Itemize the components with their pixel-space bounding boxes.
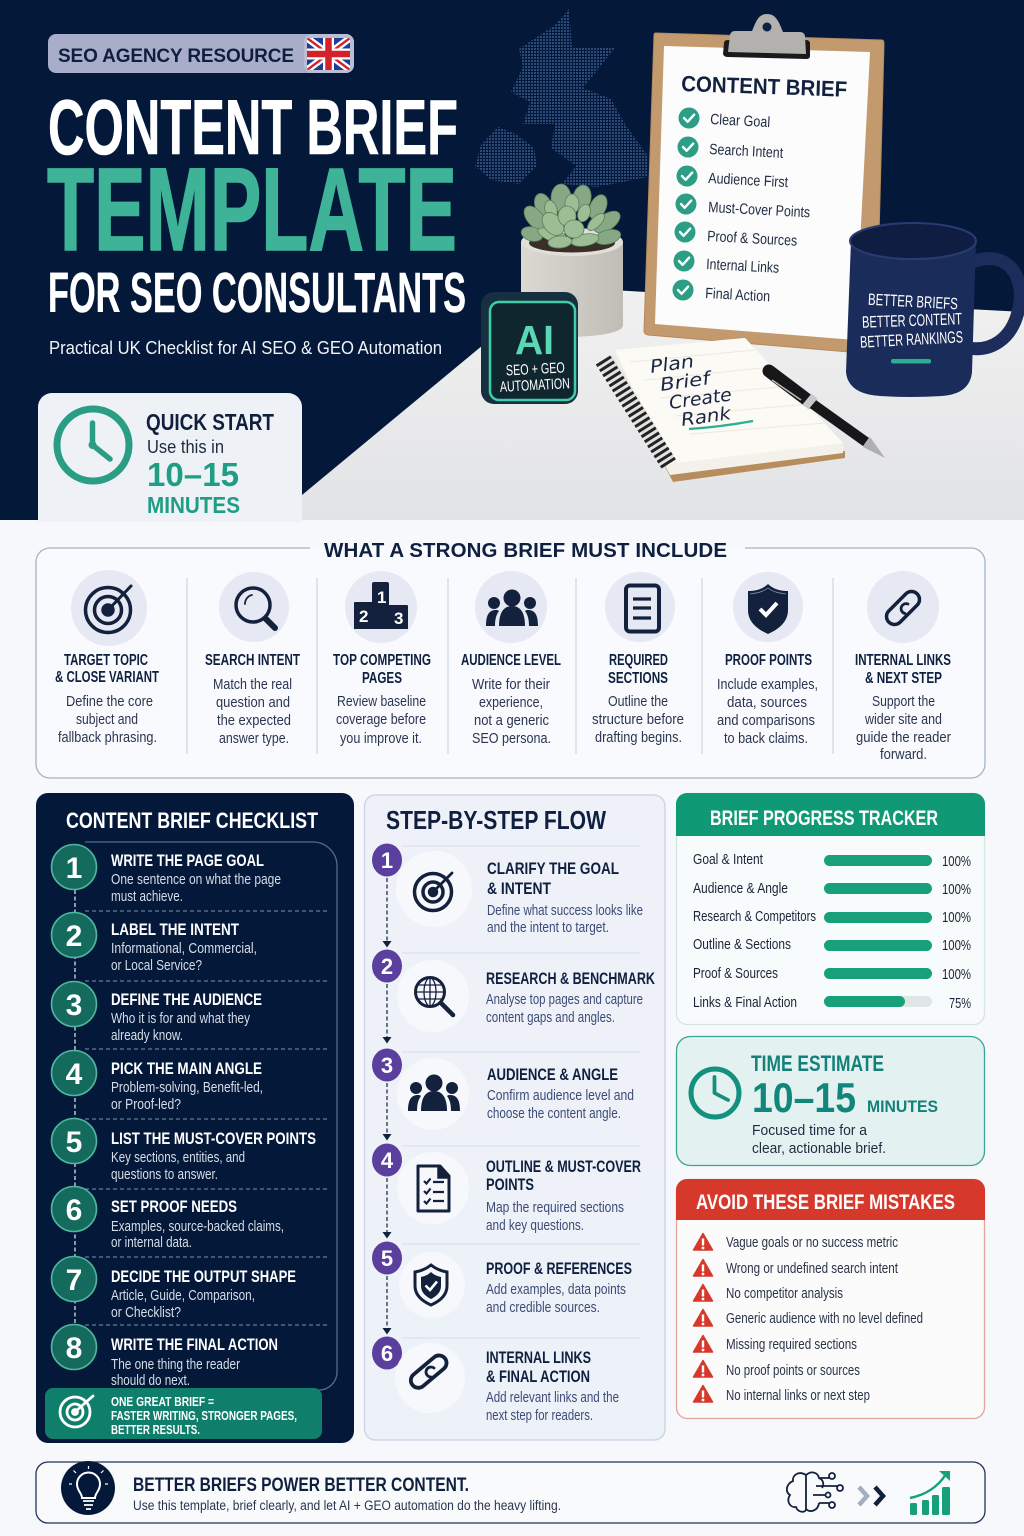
bar chart: progress rows: Proof & Sources: [693, 965, 778, 982]
column: top competing pages: Review baseline: [337, 693, 426, 710]
main title: [47, 83, 466, 325]
flow step 1: [372, 844, 643, 936]
step 1: [52, 844, 281, 905]
flow step 2: content gaps and angles.: [486, 1010, 615, 1026]
photo: navy mug: BETTER RANKINGS: [860, 328, 963, 352]
flow heading: STEP-BY-STEP FLOW: [386, 805, 606, 835]
panel: avoid these brief mistakes: [676, 1179, 985, 1418]
icon: magnifier: [236, 588, 275, 628]
dotted UK map: [475, 9, 647, 187]
panel: time estimate: 10–15: [752, 1074, 856, 1121]
column: proof points: to back claims.: [724, 730, 808, 747]
column: search intent: answer type.: [219, 730, 289, 747]
flow step 1: Define what success looks like: [487, 903, 643, 919]
flow step 6: [372, 1336, 619, 1424]
column: proof points: and comparisons: [717, 712, 815, 729]
photo: navy mug: BETTER CONTENT: [862, 310, 962, 332]
quick start card: MINUTES: [147, 492, 240, 518]
icon: chain link: [883, 588, 923, 628]
mistakes list: Vague goals or no success metric: [726, 1235, 898, 1251]
icon: UK flag: [307, 38, 350, 70]
flow step 6: next step for readers.: [486, 1408, 593, 1424]
handwritten words: Plan: [649, 351, 695, 378]
icon: chevrons: [859, 1487, 883, 1505]
icon: light bulb: [61, 1461, 115, 1515]
mistakes header: AVOID THESE BRIEF MISTAKES: [696, 1191, 955, 1214]
bar chart: progress rows: 100%: [942, 853, 971, 870]
step 5: questions to answer.: [111, 1167, 218, 1183]
column: top competing pages: you improve it.: [340, 730, 422, 747]
handwritten words: Rank: [680, 403, 734, 431]
arrows between flow steps: [382, 941, 392, 1334]
step 4: [52, 1050, 263, 1113]
column: audience level: SEO persona.: [472, 730, 551, 747]
icon: document: [626, 586, 659, 632]
column: search intent: the expected: [217, 712, 291, 729]
bar chart: progress rows: 100%: [942, 966, 971, 983]
flow step 1: & INTENT: [487, 879, 551, 898]
step 5: 5: [66, 1126, 82, 1159]
step 6: SET PROOF NEEDS: [111, 1197, 237, 1216]
icon: people: [486, 590, 538, 626]
column: search intent: Match the real: [213, 676, 292, 693]
desk surface: [302, 287, 1024, 520]
icon: podium: 1: [377, 588, 386, 607]
flow step 4: POINTS: [486, 1175, 534, 1194]
clip: [723, 14, 810, 59]
column: internal links: & NEXT STEP: [865, 670, 942, 687]
handwritten words: Create: [668, 384, 733, 414]
mistakes list: No proof points or sources: [726, 1363, 860, 1379]
column: audience level: AUDIENCE LEVEL: [461, 652, 561, 669]
checklist items: Final Action: [705, 285, 771, 305]
quick start card: [38, 393, 302, 522]
callout: one great brief: FASTER WRITING, STRONGER PAGES,: [111, 1408, 297, 1423]
step 5: LIST THE MUST-COVER POINTS: [111, 1129, 316, 1148]
icon: chain link: [408, 1352, 450, 1391]
main title: CONTENT BRIEF: [48, 83, 458, 171]
column: audience level: Write for their: [472, 676, 550, 693]
mistakes list: [694, 1234, 923, 1404]
step 8: WRITE THE FINAL ACTION: [111, 1335, 278, 1354]
hero banner: [0, 0, 1024, 522]
photo: AI cube: AUTOMATION: [499, 375, 570, 396]
flow step 4: OUTLINE & MUST-COVER: [486, 1157, 641, 1176]
callout: one great brief: [45, 1388, 322, 1439]
flow step 5: PROOF & REFERENCES: [486, 1259, 632, 1278]
bar chart: progress rows: 75%: [949, 995, 971, 1012]
bar chart: progress rows: [693, 851, 971, 1012]
closing message: Use this template, brief clearly, and let AI + GEO automation do the heavy lifting.: [133, 1498, 561, 1513]
column: internal links: [855, 571, 951, 763]
flow step 5: Add examples, data points: [486, 1282, 626, 1298]
column: target topic: Define the core: [66, 693, 153, 710]
icon: checklist document: [418, 1166, 449, 1211]
bar chart: progress rows: Goal & Intent: [693, 851, 764, 868]
column: target topic: & CLOSE VARIANT: [55, 669, 159, 686]
step 8: should do next.: [111, 1373, 190, 1389]
checklist items: Proof & Sources: [707, 228, 798, 250]
flow step 4: and key questions.: [486, 1218, 584, 1234]
step 4: PICK THE MAIN ANGLE: [111, 1059, 262, 1078]
panel: time estimate: [676, 1036, 984, 1166]
step 3: [52, 982, 262, 1044]
step 3: DEFINE THE AUDIENCE: [111, 990, 262, 1009]
section heading: WHAT A STRONG BRIEF MUST INCLUDE: [324, 539, 727, 562]
column: required sections: Outline the: [608, 693, 668, 710]
panel: brief progress tracker: [676, 793, 985, 1024]
column: required sections: REQUIRED: [609, 652, 668, 669]
step 8: [52, 1324, 278, 1389]
bar chart: progress rows: Audience & Angle: [693, 880, 788, 897]
column: search intent: SEARCH INTENT: [205, 652, 300, 669]
photo: AI cube: AI: [515, 317, 554, 363]
step 2: 2: [66, 920, 82, 953]
step 7: or Checklist?: [111, 1305, 181, 1321]
column: required sections: [592, 572, 684, 746]
clipboard heading: CONTENT BRIEF: [681, 71, 848, 102]
icon: target: [86, 586, 131, 632]
flow step 5: 5: [381, 1246, 393, 1271]
mistakes list: Wrong or undefined search intent: [726, 1261, 898, 1277]
flow step 4: 4: [381, 1148, 394, 1173]
column: top competing pages: [333, 571, 431, 747]
step 2: Informational, Commercial,: [111, 941, 257, 957]
callout: one great brief: BETTER RESULTS.: [111, 1422, 200, 1437]
icon: growth chart: [910, 1471, 950, 1515]
photo: AI cube: SEO + GEO: [505, 359, 565, 380]
bar chart: progress rows: Links & Final Action: [693, 994, 797, 1011]
flow step 6: & FINAL ACTION: [486, 1367, 590, 1386]
step 7: 7: [66, 1264, 82, 1297]
column: required sections: SECTIONS: [608, 670, 668, 687]
flow step 6: 6: [381, 1341, 393, 1366]
step 4: or Proof-led?: [111, 1097, 181, 1113]
flow step 6: Add relevant links and the: [486, 1390, 619, 1406]
panel: time estimate: clear, actionable brief.: [752, 1140, 886, 1157]
quick start card: QUICK START: [146, 409, 274, 435]
icon: target: [60, 1396, 93, 1427]
column: target topic: TARGET TOPIC: [64, 652, 148, 669]
flow step 6: INTERNAL LINKS: [486, 1348, 591, 1367]
quick start card: 10–15: [147, 456, 239, 493]
icon: clock: [691, 1069, 739, 1117]
photo: spiral notebook: [603, 338, 845, 482]
flow step 2: RESEARCH & BENCHMARK: [486, 969, 656, 988]
column: internal links: forward.: [880, 746, 927, 763]
icon: target: [414, 873, 452, 910]
flow step 3: AUDIENCE & ANGLE: [487, 1065, 618, 1084]
icon: podium: 3: [394, 609, 403, 628]
photo: clipboard with content brief: [644, 14, 884, 354]
flow step 2: 2: [381, 954, 393, 979]
icon: podium: 2: [359, 607, 368, 626]
step 2: LABEL THE INTENT: [111, 920, 239, 939]
flow step 3: Confirm audience level and: [487, 1088, 634, 1104]
column: internal links: INTERNAL LINKS: [855, 652, 951, 669]
column: search intent: question and: [216, 694, 290, 711]
column: target topic: subject and: [76, 711, 138, 728]
mistakes list: No competitor analysis: [726, 1286, 843, 1302]
bar chart: progress rows: 100%: [942, 881, 971, 898]
flow step 4: Map the required sections: [486, 1200, 624, 1216]
checklist heading: CONTENT BRIEF CHECKLIST: [66, 808, 318, 833]
column: search intent: [205, 572, 300, 747]
icon: podium: [354, 582, 408, 629]
step 1: One sentence on what the page: [111, 872, 281, 888]
step 4: Problem-solving, Benefit-led,: [111, 1080, 263, 1096]
step 6: 6: [66, 1194, 82, 1227]
panel: what a strong brief must include: [36, 539, 985, 778]
panel: time estimate: MINUTES: [867, 1097, 938, 1116]
step 6: or internal data.: [111, 1235, 192, 1251]
bar chart: progress rows: Research & Competitors: [693, 908, 816, 925]
handwritten words: [649, 351, 734, 431]
flow step 3: 3: [381, 1053, 393, 1078]
checklist items: Must-Cover Points: [708, 199, 811, 221]
icon: clock: [57, 409, 129, 481]
icon: globe magnifier: [416, 978, 453, 1015]
step 8: 8: [66, 1332, 82, 1365]
bar chart: progress rows: 100%: [942, 937, 971, 954]
column: internal links: wider site and: [864, 711, 942, 728]
flow step 3: choose the content angle.: [487, 1106, 621, 1122]
checklist items: Audience First: [708, 170, 789, 191]
step 1: WRITE THE PAGE GOAL: [111, 851, 264, 870]
step 7: DECIDE THE OUTPUT SHAPE: [111, 1267, 296, 1286]
footer banner: [36, 1461, 985, 1523]
mistakes list: Generic audience with no level defined: [726, 1311, 923, 1327]
panel: content brief checklist: [36, 793, 354, 1443]
column: top competing pages: coverage before: [336, 711, 426, 728]
flow step 3: [372, 1048, 634, 1130]
step 1: 1: [66, 852, 82, 885]
step 3: already know.: [111, 1028, 183, 1044]
column: proof points: PROOF POINTS: [725, 652, 812, 669]
panel: time estimate: Focused time for a: [752, 1122, 868, 1139]
panel: time estimate: TIME ESTIMATE: [751, 1051, 884, 1076]
step 3: 3: [66, 989, 82, 1022]
badge: SEO agency resource: [48, 34, 354, 73]
bar chart: progress rows: 100%: [942, 909, 971, 926]
flow step 1: 1: [381, 848, 393, 873]
column: required sections: drafting begins.: [595, 729, 682, 746]
photo: navy mug: [846, 223, 1020, 397]
column: top competing pages: PAGES: [362, 670, 402, 687]
main title: TEMPLATE: [47, 144, 457, 276]
panel: step-by-step flow: [364, 795, 665, 1440]
step 6: Examples, source-backed claims,: [111, 1219, 284, 1235]
step 5: Key sections, entities, and: [111, 1150, 245, 1166]
icon: shield: [748, 584, 788, 634]
step 7: Article, Guide, Comparison,: [111, 1288, 255, 1304]
column: audience level: [461, 571, 561, 747]
subtitle: Practical UK Checklist for AI SEO & GEO Automation: [49, 338, 442, 358]
step 4: 4: [66, 1058, 83, 1091]
step 6: [52, 1186, 284, 1251]
flow step 1: CLARIFY THE GOAL: [487, 859, 619, 878]
tracker header: BRIEF PROGRESS TRACKER: [710, 807, 938, 830]
column: proof points: Include examples,: [717, 676, 818, 693]
checklist items: [672, 108, 811, 305]
step 2: or Local Service?: [111, 958, 202, 974]
icon: AI brain: [787, 1472, 843, 1512]
quick start card: Use this in: [147, 437, 224, 457]
column: target topic: fallback phrasing.: [58, 729, 157, 746]
column: proof points: data, sources: [727, 694, 807, 711]
checklist items: Clear Goal: [710, 111, 771, 131]
tracker header: [676, 793, 985, 836]
mistakes header: [676, 1179, 985, 1220]
flow step 2: Analyse top pages and capture: [486, 992, 643, 1008]
column: internal links: guide the reader: [856, 729, 951, 746]
step 1: must achieve.: [111, 889, 183, 905]
column: required sections: structure before: [592, 711, 684, 728]
step 2: [52, 912, 257, 974]
photo: navy mug: BETTER BRIEFS: [867, 291, 958, 313]
step 5: [52, 1118, 316, 1183]
column: proof points: [717, 572, 818, 747]
flow step 5: [372, 1242, 632, 1318]
closing message: [133, 1475, 561, 1513]
bar chart: progress rows: Outline & Sections: [693, 936, 791, 953]
step 8: The one thing the reader: [111, 1357, 240, 1373]
mistakes list: Missing required sections: [726, 1337, 857, 1353]
step 7: [52, 1256, 296, 1321]
column: internal links: Support the: [872, 693, 935, 710]
icon: people: [408, 1074, 460, 1111]
closing message: BETTER BRIEFS POWER BETTER CONTENT.: [133, 1475, 469, 1496]
column: audience level: experience,: [479, 694, 543, 711]
callout: one great brief: ONE GREAT BRIEF =: [111, 1394, 214, 1409]
checklist items: Internal Links: [706, 256, 780, 277]
badge: SEO agency resource: SEO AGENCY RESOURCE: [58, 46, 294, 67]
column: top competing pages: TOP COMPETING: [333, 652, 431, 669]
checklist items: Search Intent: [709, 141, 784, 162]
mistakes list: No internal links or next step: [726, 1388, 870, 1404]
column: target topic: [55, 570, 159, 746]
photo: succulent in pot: [520, 184, 624, 338]
flow step 5: and credible sources.: [486, 1300, 600, 1316]
icon: shield check: [415, 1265, 447, 1305]
photo: pen: [769, 371, 885, 458]
main title: FOR SEO CONSULTANTS: [48, 261, 466, 325]
column: audience level: not a generic: [474, 712, 549, 729]
flow step 1: and the intent to target.: [487, 920, 609, 936]
flow step 4: [372, 1144, 641, 1234]
photo: AI cube: [481, 292, 578, 404]
step 3: Who it is for and what they: [111, 1011, 251, 1027]
flow step 2: [372, 950, 656, 1032]
handwritten words: Brief: [659, 368, 714, 396]
